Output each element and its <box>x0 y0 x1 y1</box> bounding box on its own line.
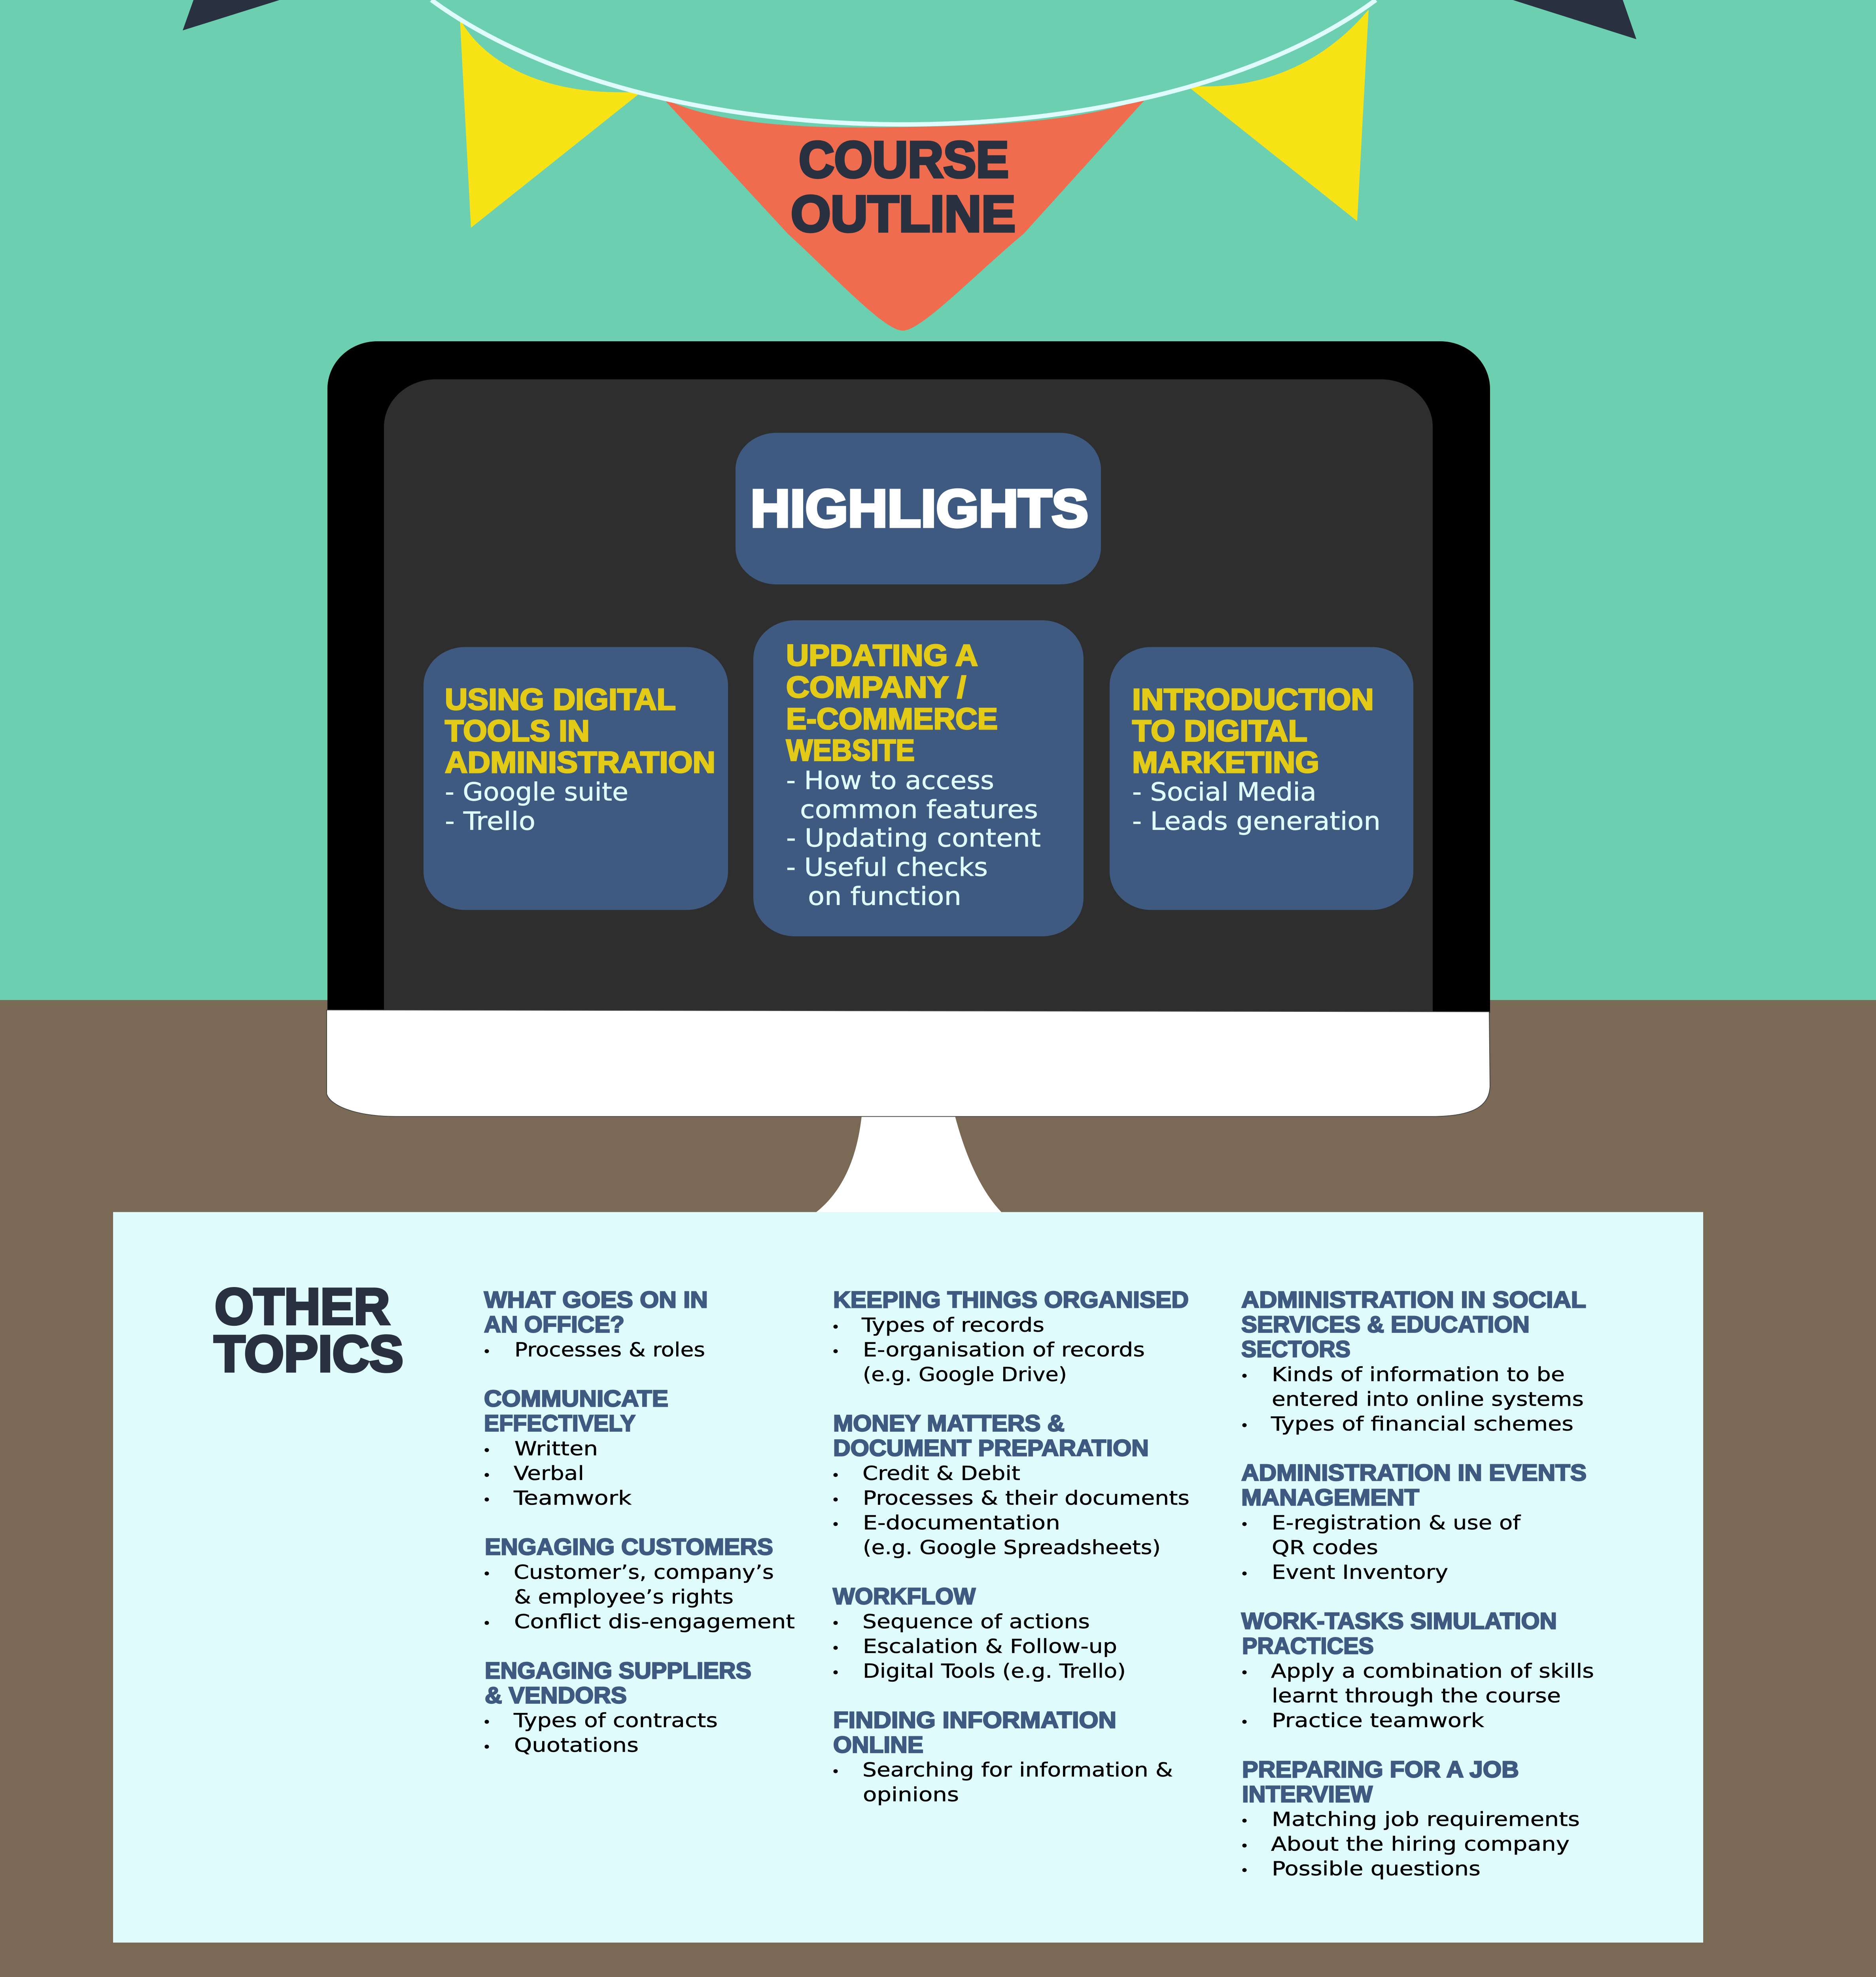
heading: updating website: WEBSITE <box>786 733 915 767</box>
heading: other topics <box>214 1278 403 1382</box>
topic: engaging customers: Conflict dis-engagement <box>514 1611 795 1633</box>
topic: what goes on in an office: WHAT GOES ON IN <box>484 1287 708 1313</box>
topic: administration in events management: E-registration & use of <box>1272 1512 1521 1534</box>
topic: administration in social services <box>1241 1287 1586 1435</box>
topic: finding information online: opinions <box>863 1784 959 1806</box>
background: table <box>0 1000 1876 1977</box>
panel: highlights title <box>736 433 1101 584</box>
topic: finding information online: FINDING INFORMATION <box>833 1707 1116 1733</box>
topic: engaging customers <box>485 1534 795 1633</box>
heading: outline: OUTLINE <box>791 185 1016 242</box>
heading: other topics: OTHER <box>215 1278 390 1335</box>
topic: preparing for a job interview: Possible questions <box>1272 1858 1481 1881</box>
heading: using digital tools <box>445 682 715 779</box>
topic: money matters and document preparation: Credit & Debit <box>862 1463 1020 1485</box>
topic: money matters and document preparation: DOCUMENT PREPARATION <box>833 1435 1149 1461</box>
monitor bezel <box>327 341 1490 1013</box>
panel: other topics <box>113 1212 1703 1943</box>
topic: money matters and document preparation: MONEY MATTERS & <box>833 1410 1065 1436</box>
topic: work-tasks simulation practices: Apply a combination of skills <box>1271 1660 1594 1682</box>
topic: communicate effectively: EFFECTIVELY <box>484 1410 635 1436</box>
topic: administration in events management: QR codes <box>1272 1537 1378 1559</box>
heading: highlights: HIGHLIGHTS <box>751 479 1088 538</box>
background: wall <box>0 0 1876 1000</box>
heading: digital marketing: MARKETING <box>1132 745 1319 779</box>
topic: engaging suppliers and vendors: ENGAGING SUPPLIERS <box>485 1658 751 1683</box>
panel: using digital tools <box>424 647 728 910</box>
heading: digital marketing: TO DIGITAL <box>1132 714 1307 748</box>
flag: yellow right <box>1188 9 1369 221</box>
monitor stand <box>815 1116 1002 1213</box>
list: marketing items: - Social Media <box>1132 778 1316 807</box>
heading: updating website: UPDATING A <box>786 638 978 672</box>
list: website items <box>786 766 1041 911</box>
topic: preparing for a job interview: PREPARING FOR A JOB <box>1242 1756 1519 1782</box>
list: website items: on function <box>808 882 961 911</box>
topic: finding information online: ONLINE <box>833 1731 923 1758</box>
topic: administration in social services: Types of financial schemes <box>1271 1413 1573 1435</box>
topic: engaging customers: Customer’s, company’s <box>514 1561 774 1584</box>
topic: keeping things organised: E-organisation of records <box>863 1339 1145 1361</box>
topic: work-tasks simulation practices: learnt through the course <box>1272 1685 1561 1707</box>
topic: workflow: Escalation & Follow-up <box>863 1635 1117 1658</box>
topic: work-tasks simulation practices: PRACTICES <box>1242 1633 1374 1659</box>
monitor <box>327 341 1490 1213</box>
topic: what goes on in an office: AN OFFICE? <box>484 1312 624 1337</box>
flag: yellow left <box>460 19 641 228</box>
list: website items: common features <box>800 795 1038 824</box>
topic: administration in social services: Kinds of information to be <box>1272 1364 1565 1386</box>
bunting banner <box>183 0 1636 331</box>
topic: engaging customers: & employee’s rights <box>514 1586 734 1608</box>
topic: money matters and document preparation: (e.g. Google Spreadsheets) <box>863 1537 1161 1559</box>
topic: finding information online <box>833 1707 1173 1806</box>
topic: workflow: WORKFLOW <box>833 1583 976 1609</box>
topic: what goes on in an office <box>484 1287 708 1361</box>
topic: administration in events management: Event Inventory <box>1272 1561 1448 1584</box>
flag: dark left <box>183 0 282 30</box>
heading: updating website <box>786 638 998 767</box>
list: website items: - How to access <box>786 766 994 795</box>
list: digital tools items: - Trello <box>445 807 535 836</box>
list: digital tools items <box>445 778 628 836</box>
heading: updating website: E-COMMERCE <box>786 702 998 735</box>
topic: keeping things organised <box>833 1287 1189 1386</box>
topic: keeping things organised: (e.g. Google Drive) <box>863 1364 1067 1386</box>
topic: preparing for a job interview: About the hiring company <box>1271 1833 1570 1856</box>
heading: using digital tools: TOOLS IN <box>445 714 590 748</box>
heading: course: COURSE <box>799 131 1009 188</box>
topic: engaging suppliers and vendors: Types of contracts <box>513 1710 718 1732</box>
topic: workflow: Digital Tools (e.g. Trello) <box>863 1660 1126 1682</box>
topic: work-tasks simulation practices: Practice teamwork <box>1272 1710 1484 1732</box>
list: marketing items <box>1132 778 1381 836</box>
topic: communicate effectively: Teamwork <box>513 1487 632 1510</box>
banner string <box>431 0 1376 125</box>
topic: workflow <box>833 1583 1126 1682</box>
topic: money matters and document preparation: E-documentation <box>863 1512 1060 1534</box>
topic: keeping things organised: KEEPING THINGS ORGANISED <box>833 1287 1189 1313</box>
flag: dark right <box>1511 0 1636 39</box>
topic: finding information online: Searching for information & <box>862 1759 1173 1781</box>
topic: engaging suppliers and vendors: & VENDORS <box>485 1682 627 1708</box>
heading: other topics: TOPICS <box>214 1325 403 1382</box>
topic: work-tasks simulation practices <box>1241 1608 1594 1732</box>
topic: engaging suppliers and vendors <box>485 1658 751 1757</box>
heading: digital marketing: INTRODUCTION <box>1132 682 1374 716</box>
panel: introduction to digital marketing <box>1110 647 1413 910</box>
topic: engaging customers: ENGAGING CUSTOMERS <box>485 1534 773 1560</box>
heading: using digital tools: ADMINISTRATION <box>445 745 715 779</box>
topic: communicate effectively <box>484 1385 668 1510</box>
topic: administration in social services: ADMINISTRATION IN SOCIAL <box>1241 1287 1586 1313</box>
topic: workflow: Sequence of actions <box>862 1611 1090 1633</box>
topic: administration in events management: ADMINISTRATION IN EVENTS <box>1241 1460 1587 1486</box>
topic: administration in events management <box>1241 1460 1587 1584</box>
topic: work-tasks simulation practices: WORK-TASKS SIMULATION <box>1241 1608 1557 1634</box>
topic: administration in social services: entered into online systems <box>1272 1388 1584 1411</box>
topic: keeping things organised: Types of records <box>861 1314 1044 1336</box>
panel: updating a website <box>753 620 1084 936</box>
topic: communicate effectively: COMMUNICATE <box>484 1385 668 1412</box>
topic: money matters and document preparation <box>833 1410 1190 1559</box>
topic: communicate effectively: Written <box>514 1438 598 1460</box>
monitor screen <box>384 379 1433 1013</box>
flag: course outline <box>663 98 1146 331</box>
topic: preparing for a job interview: Matching job requirements <box>1272 1809 1580 1831</box>
topic: administration in social services: SECTORS <box>1241 1336 1350 1362</box>
topic: communicate effectively: Verbal <box>514 1463 584 1485</box>
heading: using digital tools: USING DIGITAL <box>445 682 676 716</box>
list: marketing items: - Leads generation <box>1132 807 1381 836</box>
topic: administration in events management: MANAGEMENT <box>1241 1484 1419 1510</box>
topic: money matters and document preparation: Processes & their documents <box>863 1487 1190 1510</box>
topic: what goes on in an office: Processes & roles <box>514 1339 705 1361</box>
list: website items: - Useful checks <box>786 853 988 882</box>
topic: engaging suppliers and vendors: Quotations <box>514 1734 639 1757</box>
topic: preparing for a job interview: INTERVIEW <box>1242 1781 1373 1807</box>
heading: updating website: COMPANY / <box>786 670 966 704</box>
topic: administration in social services: SERVICES & EDUCATION <box>1241 1312 1530 1337</box>
topic: preparing for a job interview <box>1242 1756 1580 1881</box>
list: website items: - Updating content <box>786 824 1041 853</box>
heading: digital marketing <box>1132 682 1374 779</box>
monitor chin <box>327 1010 1490 1117</box>
list: digital tools items: - Google suite <box>445 778 628 807</box>
